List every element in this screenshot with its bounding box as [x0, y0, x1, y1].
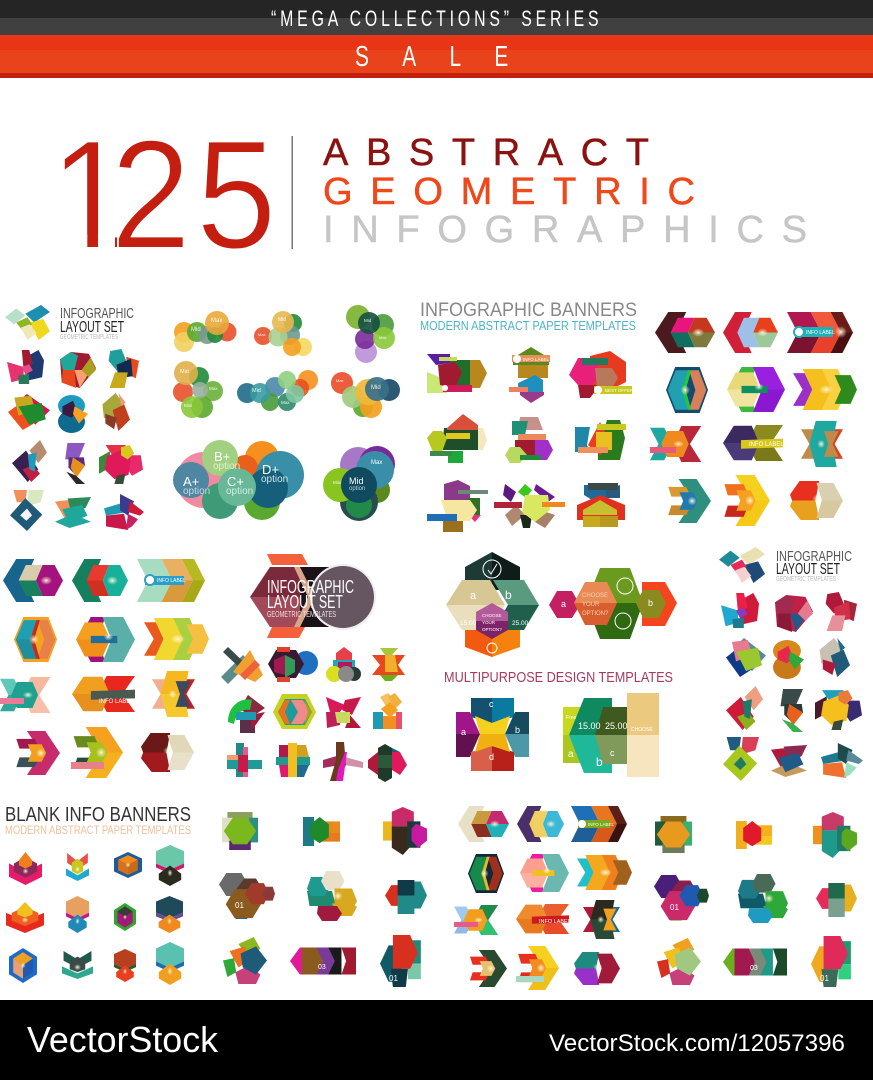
small cluster g3 house and circles: [326, 647, 361, 682]
big circles cluster A+ B+ C+ D+: option: [183, 486, 210, 497]
option cluster: price columns: 25.00: [605, 721, 628, 731]
option cluster: price columns: [563, 693, 659, 777]
arrow cluster d6: [793, 369, 857, 410]
arrow cluster d8 with info label: INFO LABEL: [749, 442, 784, 448]
blank banner i9: [9, 948, 37, 983]
option cluster: large hexagons with check and cross: 25.00: [512, 620, 529, 627]
option cluster: cross shape: d: [489, 752, 494, 762]
option cluster j9: [380, 935, 421, 987]
arrow cluster k12: [574, 952, 620, 985]
big circles cluster A+ B+ C+ D+: option: [261, 474, 288, 485]
option cluster: cross shape: [456, 698, 529, 771]
arrow cluster e8 with info label: [72, 676, 135, 712]
arrow cluster k8 with info label: [516, 904, 571, 934]
cluster: diamond bars 4: [8, 394, 50, 430]
small cluster g2 hex and circle: [268, 647, 318, 682]
option cluster l6: [816, 883, 857, 917]
arrow cluster k8 with info label: INFO LABEL: [539, 919, 571, 925]
cluster h9: [815, 690, 862, 730]
cluster h12: [821, 743, 863, 778]
cluster h10: [723, 737, 759, 781]
arrow cluster d3 with info label: [787, 312, 853, 353]
circles cluster e: Mid: [252, 388, 261, 394]
small cluster g9 cross: [227, 743, 262, 777]
cluster: cube 6: [102, 393, 130, 431]
banner cluster b2: INFO LABEL: [523, 357, 550, 362]
arrow cluster k11: [516, 946, 559, 990]
cluster h1: [721, 593, 759, 628]
banner cluster b4: [427, 414, 487, 463]
hero: infographic layout set: GEOMETRIC TEMPLATES: [267, 610, 336, 619]
blank banner i1: [9, 852, 42, 885]
option cluster: price columns: 15.00: [578, 721, 601, 731]
panel: layout set heading right: GEOMETRIC TEMPLATES: [776, 576, 836, 583]
big circles cluster A+ B+ C+ D+: option: [213, 461, 240, 472]
option cluster j7: [223, 937, 267, 984]
circles cluster c: Mid: [364, 318, 372, 323]
option cluster: price columns: b: [596, 755, 603, 769]
option cluster l5: [738, 874, 788, 923]
option cluster: cross shape: a: [461, 727, 466, 737]
arrow cluster e2: [72, 559, 128, 602]
option cluster j1: [222, 812, 258, 850]
panel: layout set heading right: [719, 547, 852, 583]
option cluster: price columns: a: [568, 749, 574, 760]
heading: blank info banners: BLANK INFO BANNERS: [5, 804, 191, 826]
arrow cluster k9: [583, 900, 620, 939]
big circles cluster Mid Max Mini: Mini: [333, 480, 341, 485]
small cluster g1 diagonal bars: [221, 647, 263, 684]
option cluster j2: [303, 817, 340, 846]
option cluster l9: [811, 936, 851, 987]
arrow cluster e9: [152, 671, 195, 717]
hero: infographic layout set: [250, 554, 376, 638]
small cluster g10 cross with hexes: [276, 743, 310, 777]
cluster: folded roof 12: [104, 494, 144, 530]
arrow cluster k7: [454, 905, 498, 935]
arrow cluster k2: [517, 806, 564, 842]
cluster h5: [773, 640, 804, 679]
big circles cluster A+ B+ C+ D+: C+: [227, 474, 244, 489]
heading: infographic banners: [420, 300, 637, 333]
banner cluster b8: [494, 484, 565, 528]
cluster: diagonal cross 7: [12, 440, 47, 482]
blank banner i12: [156, 942, 184, 985]
circles cluster b: Mid: [278, 317, 286, 323]
option cluster: large hexagons with check and cross: a: [470, 590, 477, 602]
cluster: paper hexagon 2: [60, 352, 96, 388]
arrow cluster e4: [14, 617, 57, 662]
cluster: square frame 10: [10, 490, 44, 531]
arrow cluster d9: [801, 421, 843, 467]
option cluster: horizontal hexagons: b: [648, 598, 653, 608]
circles cluster b: Max: [258, 332, 266, 337]
circles cluster e: [237, 370, 318, 411]
banner cluster b5: [505, 417, 553, 463]
arrow cluster d8 with info label: [723, 425, 784, 461]
big number 125: 125: [50, 108, 276, 281]
blank banner i10: [62, 951, 93, 979]
option cluster l8: 03: [750, 965, 758, 972]
cluster h11: [771, 745, 807, 777]
arrow cluster e5: [76, 617, 135, 662]
small cluster g12 dark hex: [368, 744, 407, 782]
option cluster: cross shape: b: [515, 725, 520, 735]
heading: infographic banners: INFOGRAPHIC BANNERS: [420, 300, 637, 321]
circles cluster f: Max: [336, 378, 344, 383]
option cluster j4: 01: [235, 901, 244, 910]
cluster h3: [826, 592, 857, 631]
title: abstract: ABSTRACT: [323, 132, 649, 174]
option cluster: horizontal hexagons: [549, 568, 677, 639]
arrow cluster d12: [790, 481, 843, 520]
banner cluster b2: [509, 347, 550, 403]
cluster h2: [775, 595, 813, 632]
circles cluster f: Mid: [371, 385, 381, 391]
cluster h4: [726, 638, 766, 677]
big circles cluster A+ B+ C+ D+: option: [226, 486, 253, 497]
footer bar: VectorStock: [27, 1019, 219, 1060]
option cluster l7: [657, 938, 701, 985]
option cluster: large hexagons with check and cross: OPTION?: [482, 627, 502, 632]
cluster: two circles 5: [58, 395, 88, 433]
arrow cluster e8 with info label: INFO LABEL: [99, 699, 134, 705]
big circles cluster A+ B+ C+ D+: B+: [214, 449, 230, 464]
arrow cluster k6: [577, 855, 632, 890]
heading: infographic banners: MODERN ABSTRACT PAPER TEMPLATES: [420, 319, 636, 333]
hero: infographic layout set: LAYOUT SET: [267, 592, 343, 612]
option cluster l9: 01: [820, 974, 829, 983]
banner cluster b3: BEST OFFER: [605, 388, 634, 393]
circles cluster d: [173, 361, 223, 418]
big circles cluster A+ B+ C+ D+: D+: [262, 462, 279, 477]
arrow cluster d5: [727, 367, 785, 412]
circles cluster a: [174, 311, 236, 352]
option cluster l8: [723, 948, 787, 976]
small cluster g5 arcs: [228, 695, 265, 733]
panel: layout set heading top-left: INFOGRAPHIC: [60, 305, 134, 322]
option cluster: large hexagons with check and cross: [446, 552, 539, 657]
option cluster: horizontal hexagons: OPTION?: [582, 611, 609, 617]
blank banner i2: [66, 853, 89, 881]
blank banner i3: [114, 852, 142, 878]
option cluster l4: [654, 875, 709, 921]
arrow cluster d2: [723, 312, 778, 353]
circles cluster c: Max: [379, 335, 387, 340]
arrow cluster d3 with info label: INFO LABEL: [806, 330, 835, 336]
arrow cluster e3 with info label: INFO LABEL: [157, 578, 186, 584]
cluster h8: [780, 689, 803, 732]
sale banner: SALE: [355, 41, 508, 73]
option cluster: large hexagons with check and cross: 15.00: [460, 620, 477, 627]
circles cluster a: Mid: [191, 327, 201, 333]
footer bar: [0, 1000, 873, 1080]
title divider: [292, 136, 293, 249]
circles cluster d: Max: [209, 386, 218, 391]
arrow cluster k10: [470, 950, 507, 987]
heading: blank info banners: MODERN ABSTRACT PAPER TEMPLATES: [5, 823, 191, 837]
arrow cluster d11: [724, 475, 770, 526]
cluster: ribbon and hex 1: [7, 350, 44, 384]
banner cluster b6: [575, 420, 626, 460]
option cluster: large hexagons with check and cross: CHOOSE: [482, 613, 502, 618]
option cluster j5: [307, 871, 357, 921]
cluster: paper shapes 3: [109, 349, 139, 388]
option cluster j6: [385, 880, 427, 914]
circles cluster e: Max: [281, 400, 290, 405]
arrow cluster e3 with info label: [137, 559, 205, 602]
option cluster: horizontal hexagons: YOUR: [582, 602, 600, 608]
option cluster l4: 01: [670, 903, 679, 912]
big circles cluster Mid Max Mini: Max: [371, 460, 382, 466]
option cluster l3: [813, 812, 857, 858]
circles cluster d: Mid: [180, 369, 189, 375]
heading: multipurpose design templates: MULTIPURPOSE DESIGN TEMPLATES: [444, 669, 673, 686]
option cluster: cross shape: c: [489, 699, 494, 709]
top banner: dark series strip: “MEGA COLLECTIONS” SERIES: [271, 8, 599, 32]
option cluster j8: 03: [318, 964, 326, 971]
cluster: hexagons 9: [99, 445, 143, 484]
option cluster: price columns: c: [610, 748, 615, 758]
arrow cluster e6: [144, 618, 209, 660]
small cluster g7 magenta star: [326, 697, 361, 728]
hero: infographic layout set: INFOGRAPHIC: [267, 577, 354, 597]
big circles cluster A+ B+ C+ D+: A+: [183, 474, 199, 489]
option cluster l2: [736, 821, 772, 849]
cluster: narrow diamond 8: [65, 443, 85, 484]
option cluster: large hexagons with check and cross: b: [505, 588, 512, 602]
option cluster j9: 01: [389, 974, 398, 983]
banner cluster b9: [577, 483, 625, 527]
arrow cluster d7: [650, 426, 701, 462]
big circles cluster Mid Max Mini: [323, 446, 395, 521]
top banner: dark series strip: [0, 0, 873, 35]
footer bar: VectorStock.com/12057396: [549, 1030, 845, 1057]
small cluster g6 ring hexagon: [273, 694, 316, 729]
circles cluster f: [331, 372, 400, 418]
big circles cluster Mid Max Mini: Mid: [349, 476, 364, 486]
option cluster j3: [383, 807, 427, 855]
blank banner i4: [156, 845, 184, 886]
option cluster: horizontal hexagons: a: [561, 599, 566, 609]
option cluster: large hexagons with check and cross: YOUR: [482, 620, 496, 625]
cluster: folded bands 11: [55, 497, 91, 528]
arrow cluster e12: [141, 733, 194, 772]
panel: layout set heading top-left: GEOMETRIC TEMPLATES: [60, 334, 118, 341]
arrow cluster k4: [468, 854, 504, 893]
arrow cluster e11: [71, 727, 123, 778]
arrow cluster k3 with info label: [571, 806, 627, 842]
panel: layout set heading top-left: LAYOUT SET: [60, 319, 124, 336]
arrow cluster k3 with info label: INFO LABEL: [588, 822, 615, 827]
cluster h7: [726, 686, 763, 730]
arrow cluster d10: [668, 479, 711, 523]
circles cluster c: [346, 305, 395, 363]
title: infographics: INFOGRAPHICS: [323, 209, 807, 251]
blank banner i6: [66, 896, 89, 933]
small cluster g11 ribbon: [323, 742, 363, 781]
arrow cluster d1: [655, 312, 715, 353]
arrow cluster e10: [16, 731, 60, 775]
sale banner: [0, 35, 873, 78]
blank banner i8: [156, 896, 183, 933]
big circles cluster Mid Max Mini: option: [349, 486, 365, 492]
circles cluster d: Mini: [184, 403, 192, 408]
arrow cluster k5: [520, 854, 569, 892]
arrow cluster e1: [3, 559, 63, 602]
banner cluster b1: [427, 354, 487, 393]
arrow cluster e7: [0, 677, 50, 713]
option cluster j4: [219, 873, 275, 919]
cluster h6: [820, 638, 850, 677]
title: geometric: GEOMETRIC: [323, 171, 695, 213]
big circles cluster A+ B+ C+ D+: [173, 440, 304, 520]
small cluster g4 star: [372, 648, 405, 681]
option cluster: horizontal hexagons: CHOOSE: [582, 593, 608, 599]
option cluster: price columns: Free: [566, 715, 576, 721]
blank banner i7: [114, 903, 136, 931]
arrow cluster d4: [666, 367, 708, 413]
circles cluster b: [254, 311, 312, 356]
option cluster: price columns: CHOOSE: [631, 727, 653, 733]
option cluster l1: [655, 816, 692, 853]
circles cluster a: Max: [211, 318, 222, 324]
panel: layout set heading right: LAYOUT SET: [776, 561, 840, 578]
arrow cluster k1: [458, 806, 509, 842]
panel: layout set heading top-left: [5, 305, 134, 341]
blank banner i5: [6, 902, 44, 933]
blank banner i11: [114, 949, 136, 982]
small cluster g8 yellow diamonds: [373, 693, 402, 729]
banner cluster b7: [427, 480, 488, 532]
option cluster j8: [290, 948, 356, 974]
heading: blank info banners: [5, 804, 191, 837]
banner cluster b3: [569, 351, 634, 398]
